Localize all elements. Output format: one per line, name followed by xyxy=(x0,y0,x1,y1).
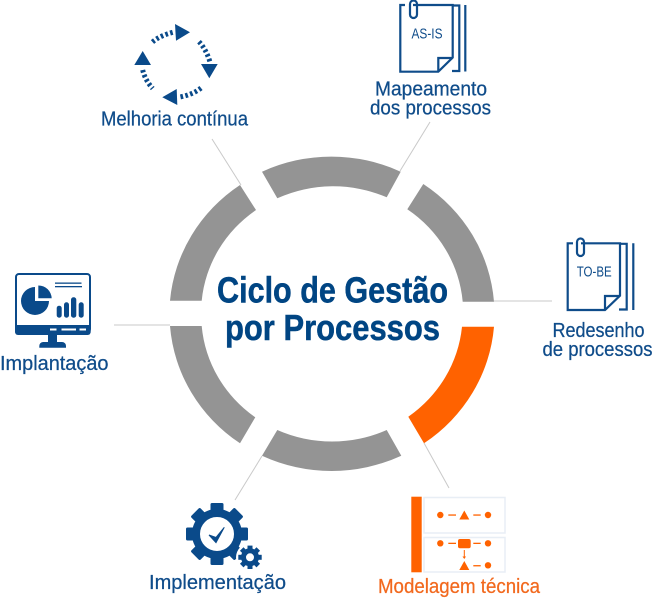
icon: process modelling diagram xyxy=(411,497,505,572)
icon: continuous improvement arrows xyxy=(134,24,218,105)
label: Mapeamento dos processos: dos processos xyxy=(370,96,491,120)
icon: monitor with charts xyxy=(15,274,91,348)
ring segment: implementação xyxy=(262,430,401,471)
ring segment: melhoria xyxy=(170,185,256,301)
ring segment: redesenho xyxy=(407,184,494,302)
icon: AS-IS document: AS-IS xyxy=(412,26,442,42)
title: Ciclo de Gestão xyxy=(217,270,448,310)
label: Melhoria contínua: Melhoria contínua xyxy=(101,108,249,130)
icon: TO-BE document xyxy=(568,239,633,310)
label: Modelagem técnica: Modelagem técnica xyxy=(378,575,541,598)
connector lines xyxy=(114,122,552,500)
icon: AS-IS document xyxy=(400,1,465,72)
label: Implantação: Implantação xyxy=(0,352,108,375)
ring segment: modelagem (highlighted) xyxy=(408,327,494,443)
label: Redesenho de processos xyxy=(542,319,652,361)
label: Mapeamento dos processos xyxy=(370,78,491,120)
ring segment: implantação xyxy=(170,326,255,443)
cycle ring xyxy=(170,157,494,471)
icon: gears with check xyxy=(186,503,264,571)
ring segment: mapeamento xyxy=(262,157,401,198)
title xyxy=(217,270,448,348)
label: Mapeamento dos processos: Mapeamento xyxy=(375,78,487,100)
icon: TO-BE document: TO-BE xyxy=(577,265,612,281)
label: Implementação: Implementação xyxy=(149,571,286,594)
title: por Processos xyxy=(225,307,440,348)
